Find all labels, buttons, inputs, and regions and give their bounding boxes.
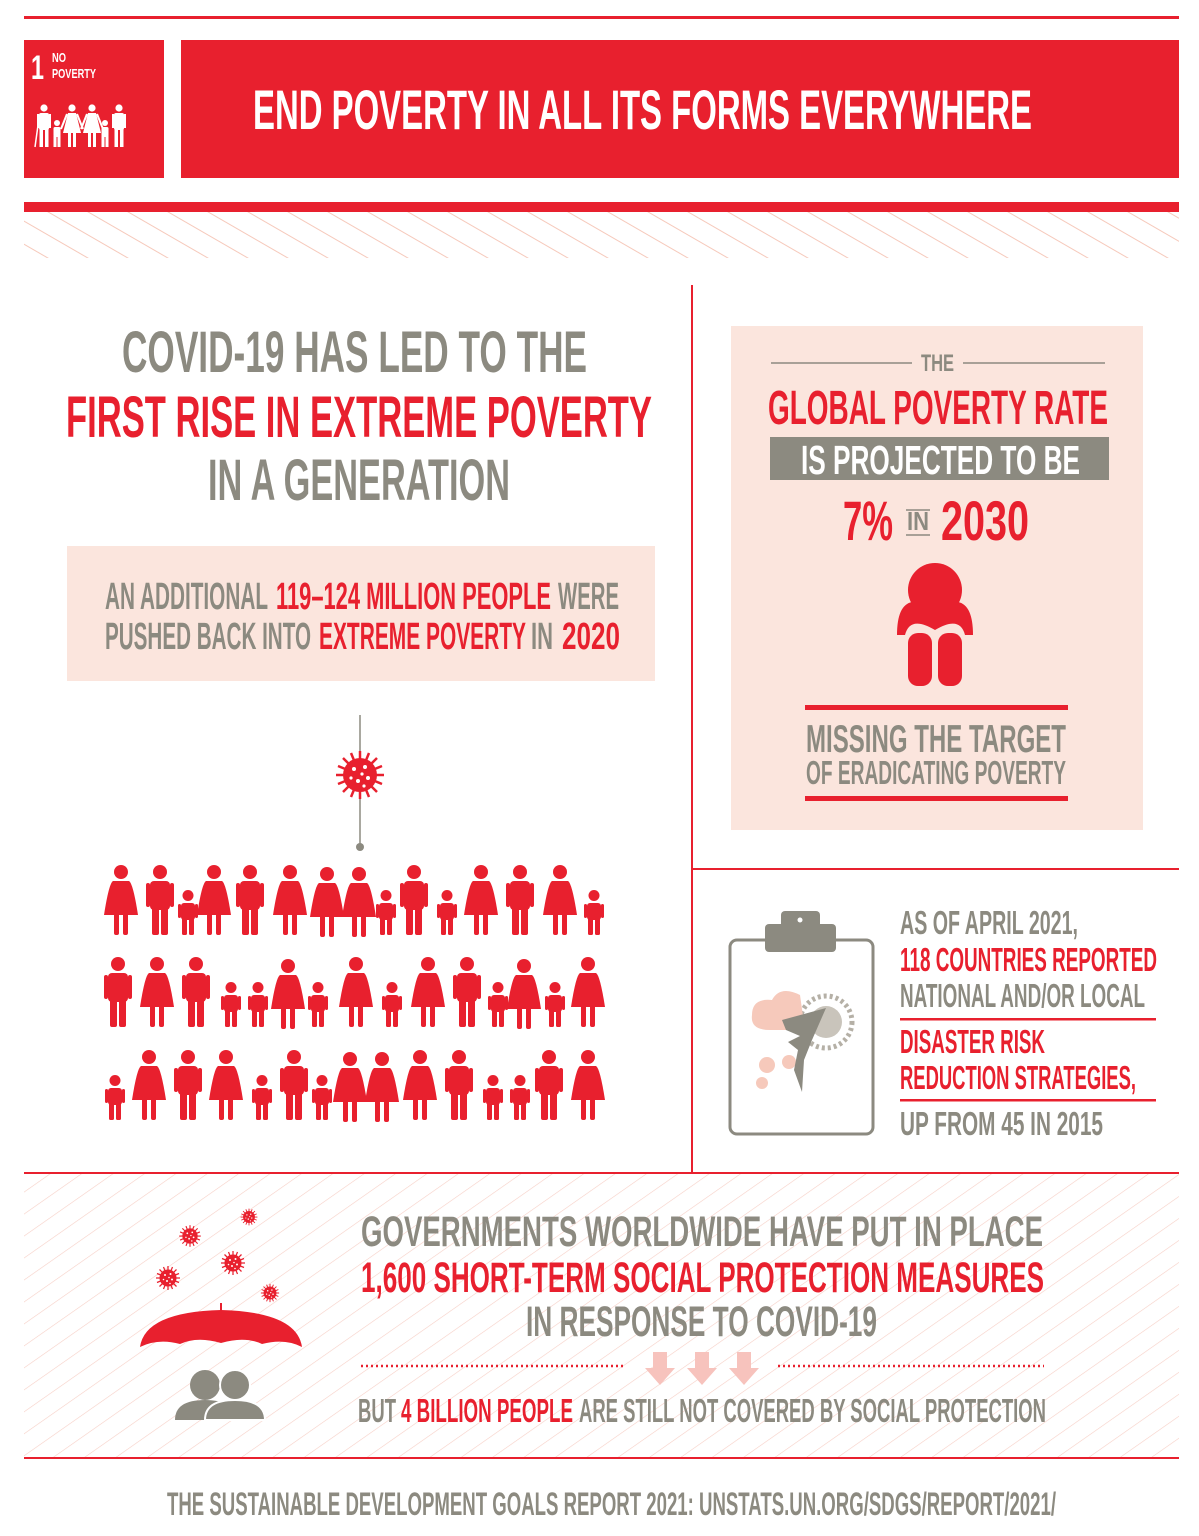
text: disaster risk strategies: DISASTER RISK — [900, 1023, 1045, 1060]
callout: additional people: AN ADDITIONAL — [105, 576, 268, 618]
callout: additional people: WERE — [558, 576, 619, 618]
text: disaster risk strategies: AS OF APRIL 2021, — [900, 904, 1078, 941]
heading: covid rise: COVID-19 HAS LED TO THE — [122, 320, 587, 385]
panel: global poverty rate: IN — [907, 506, 929, 536]
red bar with hatch — [24, 202, 1179, 258]
top rule — [24, 16, 1179, 19]
panel: global poverty rate: THE — [921, 350, 954, 377]
panel: global poverty rate — [731, 326, 1143, 830]
icon: virus on string — [336, 715, 384, 851]
panel: global poverty rate: 7% — [843, 489, 893, 552]
SDG 1 badge: POVERTY — [52, 66, 96, 81]
callout: additional people: EXTREME POVERTY — [319, 616, 526, 658]
divider lines — [691, 285, 693, 1173]
callout: additional people: 119–124 MILLION PEOPLE — [276, 576, 551, 618]
people crowd — [104, 865, 605, 1122]
panel: social protection: BUT — [358, 1392, 396, 1429]
heading: covid rise — [66, 320, 652, 513]
SDG 1 badge — [24, 40, 164, 178]
text: disaster risk strategies — [900, 904, 1157, 1142]
panel: social protection — [24, 1172, 1179, 1459]
panel: social protection: 4 BILLION PEOPLE — [401, 1392, 573, 1429]
panel: social protection: IN RESPONSE TO COVID-19 — [526, 1298, 877, 1346]
icon: viruses and umbrella — [140, 1209, 302, 1420]
title banner — [181, 40, 1179, 178]
icon: clipboard with tornado — [730, 911, 873, 1134]
icon: family — [35, 104, 126, 147]
callout: additional people — [67, 546, 655, 681]
icon: sitting person — [897, 563, 973, 686]
callout: additional people: PUSHED BACK INTO — [105, 616, 311, 658]
heading: covid rise: FIRST RISE IN EXTREME POVERTY — [66, 385, 652, 450]
heading: covid rise: IN A GENERATION — [208, 448, 510, 513]
SDG 1 badge: NO — [52, 50, 66, 65]
callout: additional people: 2020 — [562, 616, 620, 658]
panel: global poverty rate: 2030 — [941, 489, 1029, 552]
icon: down arrows — [645, 1352, 759, 1385]
callout: additional people: IN — [531, 616, 553, 658]
SDG 1 badge: 1 — [31, 49, 44, 87]
